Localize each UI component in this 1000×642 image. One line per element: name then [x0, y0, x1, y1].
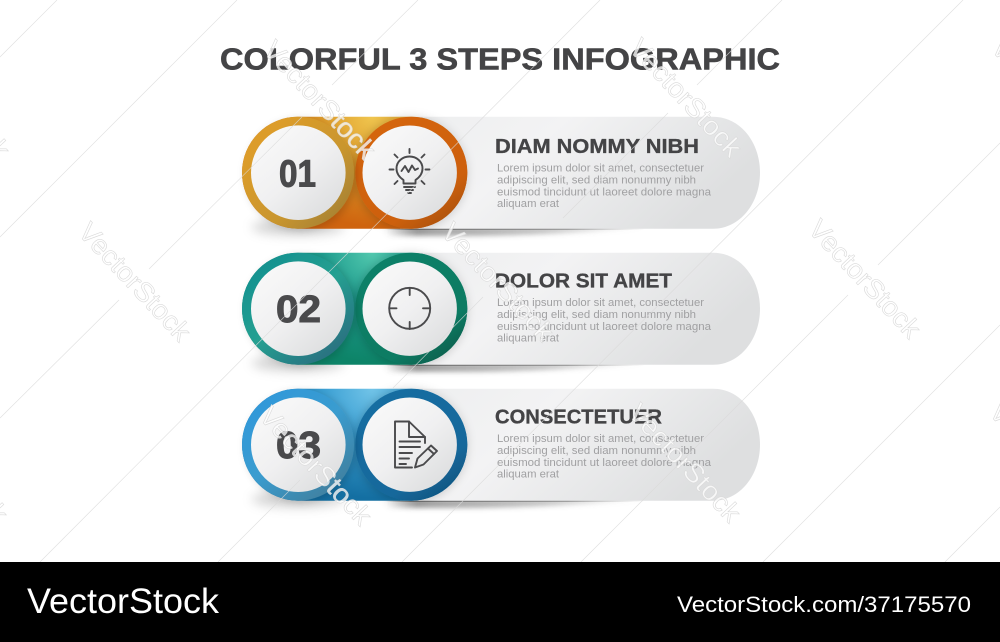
body text 1: euismod tincidunt ut laoreet dolore magna [497, 187, 712, 199]
body text 1: aliquam erat [497, 198, 560, 210]
footer bar [0, 562, 1000, 642]
footer logo text: VectorStock [27, 582, 220, 621]
left ring 2 [242, 253, 354, 365]
watermarks: VectorStock [72, 217, 197, 347]
right ring 1 [355, 117, 467, 229]
body text 2: aliquam erat [497, 332, 560, 344]
number disc 01 [251, 125, 346, 220]
colored band 3 [242, 389, 467, 501]
body text 3 [497, 433, 712, 480]
title: COLORFUL 3 STEPS INFOGRAPHIC [220, 42, 780, 76]
card 2 [400, 253, 760, 365]
left ring 1 [242, 117, 354, 229]
button shadow 2 [252, 355, 344, 371]
icon disc 1 [362, 126, 457, 220]
body text 3: Lorem ipsum dolor sit amet, consectetuer [497, 433, 704, 445]
watermarks: VectorStock [253, 401, 378, 531]
body text 3: euismod tincidunt ut laoreet dolore magna [497, 457, 712, 469]
watermarks: VectorStock [623, 33, 748, 163]
body text 2: Lorem ipsum dolor sit amet, consectetuer [497, 297, 704, 309]
body text 1 [497, 163, 712, 210]
panel: step 2 [242, 253, 760, 372]
body text 1: Lorem ipsum dolor sit amet, consectetuer [497, 163, 704, 175]
right ring 3 [355, 389, 467, 501]
card 1 [400, 117, 760, 229]
panel: step 3 [242, 389, 760, 508]
card 3 [400, 389, 760, 501]
card shadow 3 [385, 499, 650, 508]
body text 2 [497, 297, 712, 344]
button shadow 1 [252, 219, 344, 235]
button shadow 3 [252, 491, 344, 507]
panel: step 1 [242, 117, 760, 236]
number disc 03 [251, 397, 346, 492]
body text 1: adipiscing elit, sed diam nonummy nibh [497, 175, 696, 187]
number 03: 03 [276, 425, 321, 467]
card shadow 1 [385, 227, 650, 236]
number 01: 01 [279, 154, 316, 196]
watermarks: VectorStock [435, 217, 560, 347]
card edge shadow 1 [385, 228, 645, 230]
card shadow 2 [385, 363, 650, 372]
body text 2: euismod tincidunt ut laoreet dolore magna [497, 321, 712, 333]
watermarks: VectorStock [802, 214, 927, 344]
watermarks: VectorStock [622, 398, 747, 528]
footer image id: VectorStock.com/37175570 [677, 592, 971, 617]
icon disc 3 [362, 398, 457, 492]
watermarks [0, 33, 1000, 531]
body text 3: aliquam erat [497, 468, 560, 480]
body text 2: adipiscing elit, sed diam nonummy nibh [497, 309, 696, 321]
right ring 2 [355, 253, 467, 365]
body text 3: adipiscing elit, sed diam nonummy nibh [497, 445, 696, 457]
watermarks: VectorStock [257, 35, 382, 165]
left ring 3 [242, 389, 354, 501]
icon: document with pencil [395, 422, 437, 468]
colored band 2 [242, 253, 467, 365]
number disc 02 [251, 261, 346, 356]
icon: target [389, 288, 430, 329]
colored band 1 [242, 117, 467, 229]
heading 3: CONSECTETUER [495, 406, 662, 428]
number 02: 02 [276, 289, 321, 331]
heading 1: DIAM NOMMY NIBH [495, 135, 699, 158]
icon disc 2 [362, 262, 457, 356]
heading 2: DOLOR SIT AMET [495, 270, 672, 292]
card edge shadow 3 [385, 500, 645, 502]
icon: light bulb [390, 149, 430, 193]
card edge shadow 2 [385, 364, 645, 366]
